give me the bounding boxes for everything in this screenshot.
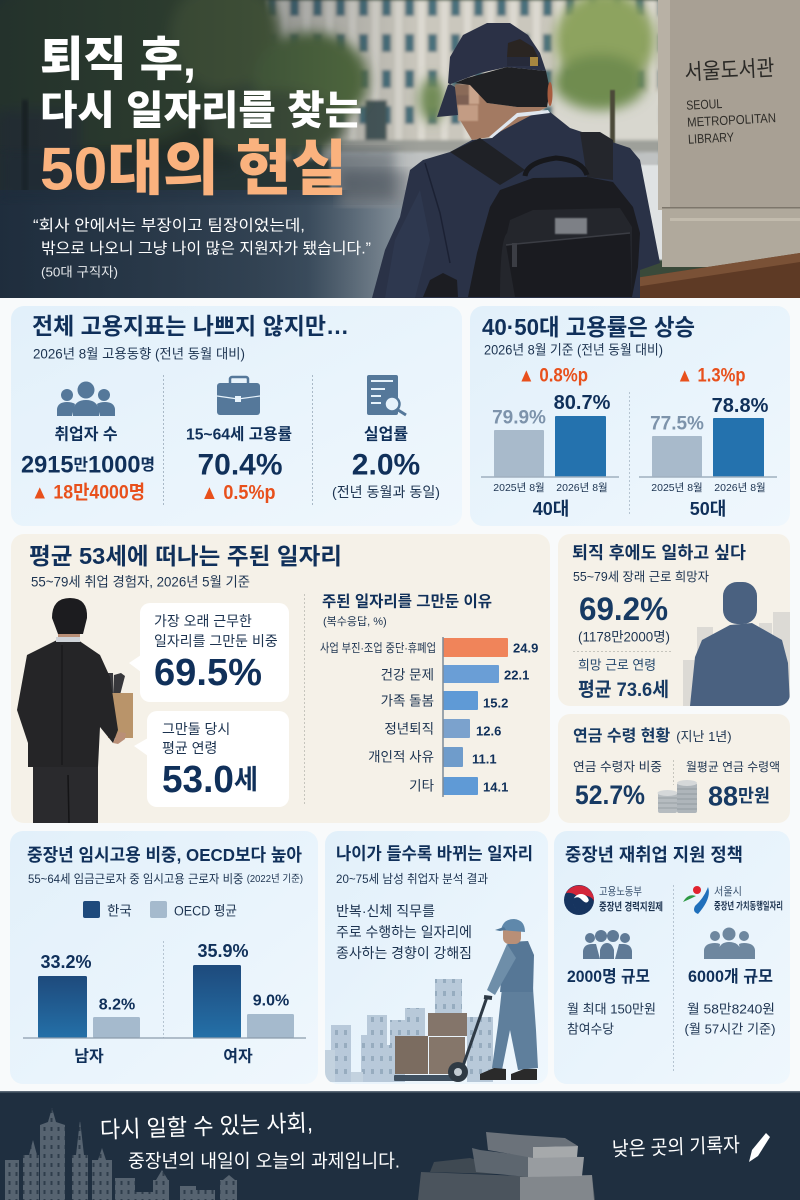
bar chart: women: 35.9% bbox=[197, 941, 249, 961]
employment rate stat bbox=[186, 377, 292, 504]
policy: Seoul City: 서울시 bbox=[714, 885, 742, 898]
panel heading: 중장년 재취업 지원 정책 bbox=[565, 845, 743, 865]
panel: re-employment support policies bbox=[554, 831, 790, 1084]
bar chart: reasons for leaving: 11.1 bbox=[472, 752, 497, 766]
icon: report with magnifier bbox=[367, 375, 406, 415]
bar chart: 40s bbox=[481, 366, 619, 519]
bar chart: men: 33.2% bbox=[40, 952, 92, 972]
icon: people bbox=[57, 382, 115, 416]
bar chart: 40s: 79.9% bbox=[492, 408, 546, 428]
icon: government taegeuk logo bbox=[564, 885, 594, 915]
bar chart: 40s: 80.7% bbox=[554, 392, 611, 414]
bar chart: reasons for leaving: 사업 부진·조업 중단·휴폐업 bbox=[320, 641, 436, 655]
bar chart: 40s: ▲ 0.8%p bbox=[518, 366, 588, 386]
hero quote: (50대 구직자) bbox=[41, 264, 118, 280]
hero title: 다시 일자리를 찾는 bbox=[40, 89, 362, 133]
stat: monthly pension: 월평균 연금 수령액 bbox=[686, 760, 780, 774]
library pillar bbox=[658, 0, 800, 267]
bar chart: reasons for leaving: 24.9 bbox=[513, 640, 538, 656]
stat: desired working age: 희망 근로 연령 bbox=[578, 658, 656, 672]
stat: pension recipients: 52.7% bbox=[575, 780, 645, 810]
hero quote: 밖으로 나오니 그냥 나이 많은 지원자가 됐습니다.” bbox=[41, 240, 371, 258]
panel heading: 평균 53세에 떠나는 주된 일자리 bbox=[29, 543, 342, 569]
legend: 한국 bbox=[107, 904, 132, 918]
stat: share wishing to work: (1178만2000명) bbox=[578, 630, 670, 644]
footer message bbox=[100, 1110, 400, 1172]
panel subtitle: 20~75세 남성 취업자 분석 결과 bbox=[336, 872, 488, 886]
panel: leaving main job at average 53 bbox=[11, 534, 550, 823]
bar chart: reasons for leaving: 14.1 bbox=[483, 780, 508, 794]
panel heading: 중장년 임시고용 비중, OECD보다 높아 bbox=[27, 845, 302, 865]
library pillar: 서울도서관 bbox=[684, 55, 775, 85]
policy: Seoul City: (월 57시간 기준) bbox=[684, 1022, 776, 1036]
footer message: 중장년의 내일이 오늘의 과제입니다. bbox=[128, 1150, 400, 1172]
panel: employment rate in 40s and 50s bbox=[470, 306, 790, 526]
bar chart: 50s: 50대 bbox=[690, 499, 726, 519]
callout: average age at leaving bbox=[134, 711, 289, 807]
policy: Ministry of Employment and Labor bbox=[564, 885, 663, 1036]
policy: Seoul City bbox=[683, 885, 783, 1036]
man bbox=[372, 23, 660, 298]
policy: Ministry of Employment and Labor: 참여수당 bbox=[567, 1022, 614, 1036]
stat: share wishing to work bbox=[578, 591, 670, 644]
hero quote bbox=[33, 216, 371, 280]
bar chart: reasons for leaving: 기타 bbox=[409, 778, 435, 794]
hero title bbox=[40, 32, 362, 202]
illustration: worker pushing boxes in city bbox=[325, 919, 538, 1082]
employed persons stat: 취업자 수 bbox=[54, 426, 118, 444]
policy: Ministry of Employment and Labor: 2000명 규모 bbox=[567, 967, 650, 986]
bar chart: men: 남자 bbox=[74, 1048, 104, 1066]
bar chart: 50s: 78.8% bbox=[712, 395, 769, 417]
library pillar: METROPOLITAN bbox=[687, 110, 776, 130]
panel: overall employment indicators bbox=[11, 306, 462, 526]
signature: 낮은 곳의 기록자 bbox=[612, 1134, 740, 1161]
icon: Seoul city logo bbox=[683, 886, 709, 914]
body text: 종사하는 경향이 강해짐 bbox=[336, 945, 472, 961]
panel subtitle: 55~79세 장래 근로 희망자 bbox=[573, 570, 709, 584]
unemployment rate stat: 2.0% bbox=[352, 448, 420, 482]
stat: desired working age: 평균 73.6세 bbox=[578, 679, 669, 701]
callout: share leaving longest job bbox=[129, 603, 289, 702]
panel: want to work after retirement bbox=[558, 534, 790, 706]
stat: monthly pension bbox=[686, 760, 780, 812]
bar chart: 50s: ▲ 1.3%p bbox=[676, 366, 746, 386]
body text: 주로 수행하는 일자리에 bbox=[336, 924, 472, 940]
bar chart: 50s: 2026년 8월 bbox=[714, 482, 766, 494]
employment rate stat: ▲ 0.5%p bbox=[200, 482, 276, 504]
icon: people group bbox=[583, 930, 632, 959]
callout: average age at leaving: 평균 연령 bbox=[162, 740, 217, 756]
illustration: stack of books bbox=[418, 1132, 595, 1200]
stat: pension recipients bbox=[573, 760, 662, 810]
illustration: man silhouette with skyline bbox=[683, 582, 790, 706]
bar chart: 40s: 2026년 8월 bbox=[556, 482, 608, 494]
stat: pension recipients: 연금 수령자 비중 bbox=[573, 760, 662, 774]
panel subtitle: 55~79세 취업 경험자, 2026년 5월 기준 bbox=[31, 574, 250, 590]
chart heading: 주된 일자리를 그만둔 이유 bbox=[322, 592, 492, 610]
bar chart: reasons for leaving: 가족 돌봄 bbox=[381, 694, 434, 708]
panel heading: 나이가 들수록 바뀌는 일자리 bbox=[336, 844, 533, 864]
employment rate stat: 15~64세 고용률 bbox=[186, 426, 292, 444]
illustration: man in suit carrying box bbox=[17, 598, 133, 823]
bar chart: women bbox=[193, 941, 294, 1066]
library pillar: SEOUL bbox=[686, 96, 723, 113]
panel subtitle: 2026년 8월 고용동향 (전년 동월 대비) bbox=[33, 346, 245, 362]
hero quote: “회사 안에서는 부장이고 팀장이었는데, bbox=[33, 216, 305, 234]
panel subtitle: 2026년 8월 기준 (전년 동월 대비) bbox=[484, 342, 663, 358]
employed persons stat bbox=[21, 382, 155, 504]
bar chart: 40s: 2025년 8월 bbox=[493, 482, 545, 494]
bar chart: 50s: 2025년 8월 bbox=[651, 482, 703, 494]
footer message: 다시 일할 수 있는 사회, bbox=[100, 1110, 313, 1143]
chart note: (복수응답, %) bbox=[323, 615, 387, 628]
stat: monthly pension: 88만원 bbox=[708, 780, 770, 812]
employed persons stat: 2915만1000명 bbox=[21, 452, 155, 478]
policy: Ministry of Employment and Labor: 중장년 경력지원제 bbox=[599, 900, 663, 913]
bar chart: women: 9.0% bbox=[253, 992, 289, 1010]
panel heading: 40·50대 고용률은 상승 bbox=[482, 314, 695, 340]
bar chart: 40s: 40대 bbox=[533, 499, 569, 519]
hero title: 퇴직 후, bbox=[40, 32, 196, 86]
panel heading: 퇴직 후에도 일하고 싶다 bbox=[572, 544, 746, 562]
callout: share leaving longest job: 일자리를 그만둔 비중 bbox=[154, 633, 278, 649]
footer banner bbox=[0, 1091, 800, 1200]
panel subtitle: 55~64세 임금근로자 중 임시고용 근로자 비중 (2022년 기준) bbox=[28, 872, 303, 886]
employment rate stat: 70.4% bbox=[197, 448, 283, 482]
bar chart: women: 여자 bbox=[223, 1048, 253, 1066]
bar chart: reasons for leaving: 건강 문제 bbox=[381, 668, 434, 682]
employed persons stat: ▲ 18만4000명 bbox=[31, 482, 145, 504]
legend bbox=[83, 901, 237, 918]
body text bbox=[336, 903, 472, 961]
unemployment rate stat: (전년 동월과 동일) bbox=[332, 484, 440, 500]
policy: Seoul City: 월 58만8240원 bbox=[687, 1002, 775, 1016]
stat: desired working age bbox=[578, 658, 669, 701]
body text: 반복·신체 직무를 bbox=[336, 903, 435, 919]
hero title: 50대의 현실 bbox=[40, 136, 347, 202]
icon: people group bbox=[704, 928, 755, 959]
panel: temporary employment vs OECD bbox=[10, 831, 318, 1084]
hero banner bbox=[0, 0, 800, 298]
unemployment rate stat: 실업률 bbox=[364, 426, 408, 444]
panel: jobs change with age bbox=[325, 831, 548, 1084]
bar chart: men: 8.2% bbox=[99, 996, 135, 1014]
bar chart: reasons for leaving: 12.6 bbox=[476, 724, 501, 738]
bar chart: reasons for leaving bbox=[320, 637, 538, 797]
policy: Ministry of Employment and Labor: 고용노동부 bbox=[599, 885, 642, 898]
stat: share wishing to work: 69.2% bbox=[579, 591, 668, 627]
panel heading: 전체 고용지표는 나쁘지 않지만… bbox=[32, 313, 349, 339]
unemployment rate stat bbox=[332, 375, 440, 500]
legend: OECD 평균 bbox=[174, 904, 237, 918]
icon: coin stacks bbox=[658, 780, 697, 813]
bar chart: 50s bbox=[639, 366, 777, 519]
bar chart: reasons for leaving: 개인적 사유 bbox=[368, 750, 434, 764]
policy: Seoul City: 6000개 규모 bbox=[688, 967, 773, 986]
illustration: city skyline bbox=[5, 1108, 237, 1200]
callout: average age at leaving: 53.0세 bbox=[162, 759, 258, 801]
bar chart: reasons for leaving: 정년퇴직 bbox=[384, 722, 434, 736]
policy: Ministry of Employment and Labor: 월 최대 150만원 bbox=[567, 1002, 656, 1016]
icon: pen bbox=[749, 1133, 770, 1162]
callout: share leaving longest job: 69.5% bbox=[154, 652, 262, 694]
library pillar: LIBRARY bbox=[688, 129, 735, 147]
bar chart: reasons for leaving: 15.2 bbox=[483, 696, 508, 710]
callout: share leaving longest job: 가장 오래 근무한 bbox=[154, 613, 252, 629]
bench bbox=[635, 253, 800, 298]
panel heading: 연금 수령 현황 (지난 1년) bbox=[573, 726, 732, 744]
bar chart: men bbox=[38, 952, 140, 1066]
panel: pension status bbox=[558, 714, 790, 823]
bar chart: reasons for leaving: 22.1 bbox=[504, 668, 529, 682]
hero photo: man with backpack in front of library bbox=[0, 0, 800, 298]
bar chart: 50s: 77.5% bbox=[650, 414, 704, 434]
icon: briefcase bbox=[217, 377, 260, 415]
callout: average age at leaving: 그만둘 당시 bbox=[162, 721, 230, 737]
